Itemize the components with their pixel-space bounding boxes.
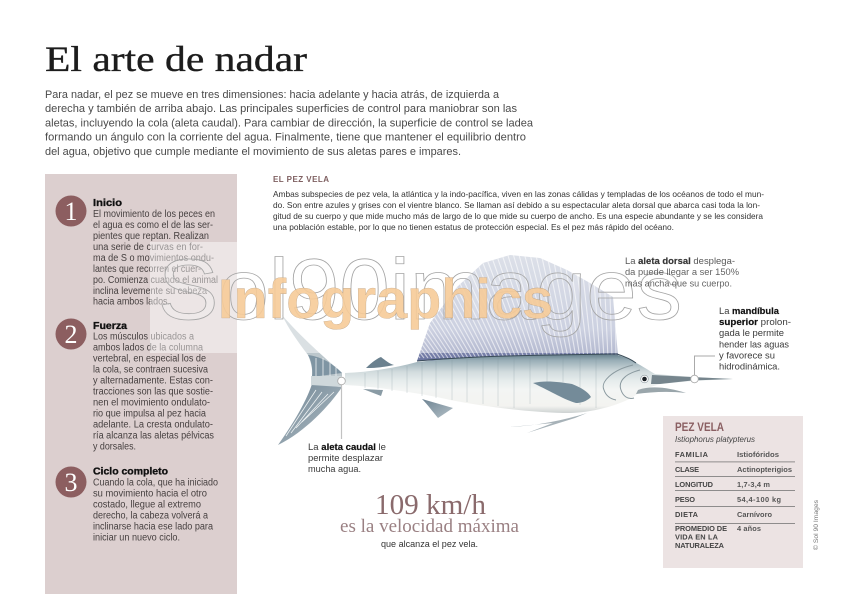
step 1: inicio: hacia ambos lados. (93, 296, 170, 308)
anal fin large (422, 399, 453, 418)
step 1: inicio: lantes que recorren el cuer- (93, 264, 201, 275)
step 1: inicio: El movimiento de los peces en (93, 209, 215, 220)
jaw text: gada le permite (719, 328, 784, 339)
jaw text: hender las aguas (719, 340, 789, 350)
section heading: el pez vela: EL PEZ VELA (273, 175, 329, 184)
step 2: fuerza (56, 318, 214, 452)
facts table: 54,4-100 kg (737, 495, 781, 504)
card background (663, 416, 803, 568)
body bars (365, 356, 596, 408)
facts table: Carnívoro (737, 510, 772, 519)
tail text (308, 442, 386, 475)
intro text: aletas, incluyendo la cola (aleta caudal). Para cambiar de dirección, la superficie de control se ladea (45, 118, 534, 130)
tail fin (278, 315, 342, 445)
jaw text: La mandíbula (719, 306, 780, 317)
card heading: PEZ VELA (675, 422, 724, 434)
scientific name: Istiophorus platypterus (675, 435, 755, 444)
step 2: fuerza: la cola, se contraen sucesiva (93, 364, 208, 376)
speed statistic: que alcanza el pez vela. (381, 539, 478, 549)
step 2: fuerza: ría alcanza las aletas pélvicas (93, 430, 214, 442)
lower jaw (636, 387, 686, 394)
tail text: permite desplazar (308, 453, 384, 464)
step 1: inicio: el agua es como el de las ser- (93, 220, 213, 231)
section description: gitud de su cuerpo y que mide mucho más de largo de lo que mide su cuerpo de ancho. Es una especie abundante y se les considera (273, 211, 763, 221)
facts table (675, 450, 795, 550)
step 3: ciclo completo: iniciar un nuevo ciclo. (93, 532, 180, 544)
speed statistic: 109 km/h (375, 489, 486, 521)
facts table: FAMILIA (675, 450, 709, 459)
tail marker (338, 377, 345, 385)
dorsal sail (417, 255, 618, 361)
step 1: inicio: Inicio (93, 197, 122, 209)
step 2: fuerza: y dorsales. (93, 442, 136, 452)
step 2: fuerza: ambos lados de la columna (93, 342, 203, 354)
facts table: Actinopterigios (737, 465, 792, 474)
speed statistic (340, 489, 520, 549)
callout: dorsal fin: da puede llegar a ser 150% (625, 267, 739, 278)
callout: dorsal fin: más ancha que su cuerpo. (625, 278, 732, 290)
step 3: ciclo completo: derecho, la cabeza volverá a (93, 510, 208, 522)
section description: do. Son entre azules y grises con el vientre blanco. Se llaman así debido a su espectacular aleta dorsal que abarca casi toda la lon- (273, 200, 760, 210)
step 2: fuerza: rio que impulsa al pez hacia (93, 408, 206, 420)
watermark overlay: Infographics (218, 267, 553, 330)
panel background (45, 174, 237, 594)
section description: una población estable, por lo que no tienen estatus de protección especial. Es el pez más rápido del océano. (273, 222, 674, 232)
illustration: sailfish (278, 255, 732, 445)
fact card: pez vela (663, 416, 803, 568)
facts table: CLASE (675, 465, 699, 474)
step 2: fuerza: Fuerza (93, 320, 127, 332)
jaw text: superior prolon- (719, 317, 791, 328)
facts table: PESO (675, 495, 695, 504)
facts table: 1,7-3,4 m (737, 480, 770, 489)
step 1: inicio: inclina levemente su cabeza (93, 286, 207, 297)
gill covers (603, 365, 640, 400)
intro text (45, 89, 534, 158)
title: El arte de nadar (45, 39, 307, 79)
callout: tail fin (308, 377, 386, 475)
pectoral fin (533, 381, 591, 403)
jaw marker (691, 375, 698, 383)
step 2: fuerza: Los músculos ubicados a (93, 332, 194, 342)
step 2: fuerza: tracciones son las que sostie- (93, 386, 213, 398)
anal fin small (363, 389, 383, 396)
callout: dorsal fin (625, 256, 739, 290)
callout: dorsal fin: La aleta dorsal desplega- (625, 256, 735, 267)
speed statistic: es la velocidad máxima (340, 516, 520, 537)
tail text: La aleta caudal le (308, 442, 386, 453)
image credit: © Sol 90 Images (812, 499, 820, 550)
step 1: inicio (56, 196, 218, 308)
eye (641, 375, 648, 383)
step 2: fuerza: y alternadamente. Estas con- (93, 376, 213, 386)
step 1: inicio: pientes que reptan. Realizan (93, 231, 209, 242)
callout: upper jaw (691, 306, 791, 383)
dorsal ridge (417, 354, 636, 363)
step 1: inicio: ma de S o movimientos ondu- (93, 253, 214, 264)
intro text: formando un ángulo con la corriente del agua. Finalmente, tiene que mantener el equilibrio dentro (45, 132, 526, 144)
section description (273, 189, 764, 232)
step 3: ciclo completo: Cuando la cola, que ha iniciado (93, 478, 218, 488)
watermark overlay: Sol90images (158, 242, 682, 338)
jaw text: hidrodinámica. (719, 362, 780, 372)
step 3: ciclo completo: costado, llegue al extremo (93, 500, 201, 510)
bill (651, 375, 733, 384)
fish body (345, 354, 733, 413)
facts table: DIETA (675, 510, 699, 519)
jaw text (719, 306, 791, 372)
step 3: ciclo completo: inclinarse hacia ese lado para (93, 522, 213, 532)
step 2: fuerza: 2 (64, 320, 78, 349)
intro text: Para nadar, el pez se mueve en tres dimensiones: hacia adelante y hacia atrás, de izquierda a (45, 89, 500, 101)
facts table: VIDA EN LA (675, 532, 719, 542)
facts table: NATURALEZA (675, 541, 725, 550)
step 2: fuerza: nen el movimiento ondulato- (93, 398, 210, 408)
tail leader line (340, 385, 342, 439)
step 3: ciclo completo (56, 466, 218, 544)
step 2: fuerza: adelante. La cresta ondulato- (93, 420, 213, 430)
facts table: PROMEDIO DE (675, 524, 727, 533)
step 3: ciclo completo: 3 (64, 468, 78, 497)
step 1: inicio: 1 (64, 197, 78, 226)
intro text: derecha y también de arriba abajo. Las principales superficies de control para maniobrar son las (45, 103, 517, 115)
step 1: inicio: una serie de curvas en for- (93, 242, 203, 253)
panel: swimming steps (45, 174, 237, 594)
tail text: mucha agua. (308, 464, 361, 475)
step 3: ciclo completo: su movimiento hacia el otro (93, 488, 207, 500)
jaw leader line (694, 356, 715, 375)
intro text: del agua, objetivo que cumple mediante el movimiento de sus aletas pares e impares. (45, 146, 461, 158)
section description: Ambas subspecies de pez vela, la atlántica y la indo-pacífica, viven en las zonas cálidas y templadas de los océanos de todo el mun- (273, 189, 764, 199)
step 2: fuerza: vertebral, en especial los de (93, 354, 206, 364)
facts table: LONGITUD (675, 480, 714, 489)
facts table: Istiofóridos (737, 450, 779, 459)
step 1: inicio: po. Comienza cuando el animal (93, 275, 218, 286)
jaw text: y favorece su (719, 350, 775, 362)
pelvic fins (510, 413, 587, 433)
step 3: ciclo completo: Ciclo completo (93, 466, 168, 478)
small dorsal fin (366, 357, 394, 368)
facts table: 4 años (737, 524, 761, 533)
